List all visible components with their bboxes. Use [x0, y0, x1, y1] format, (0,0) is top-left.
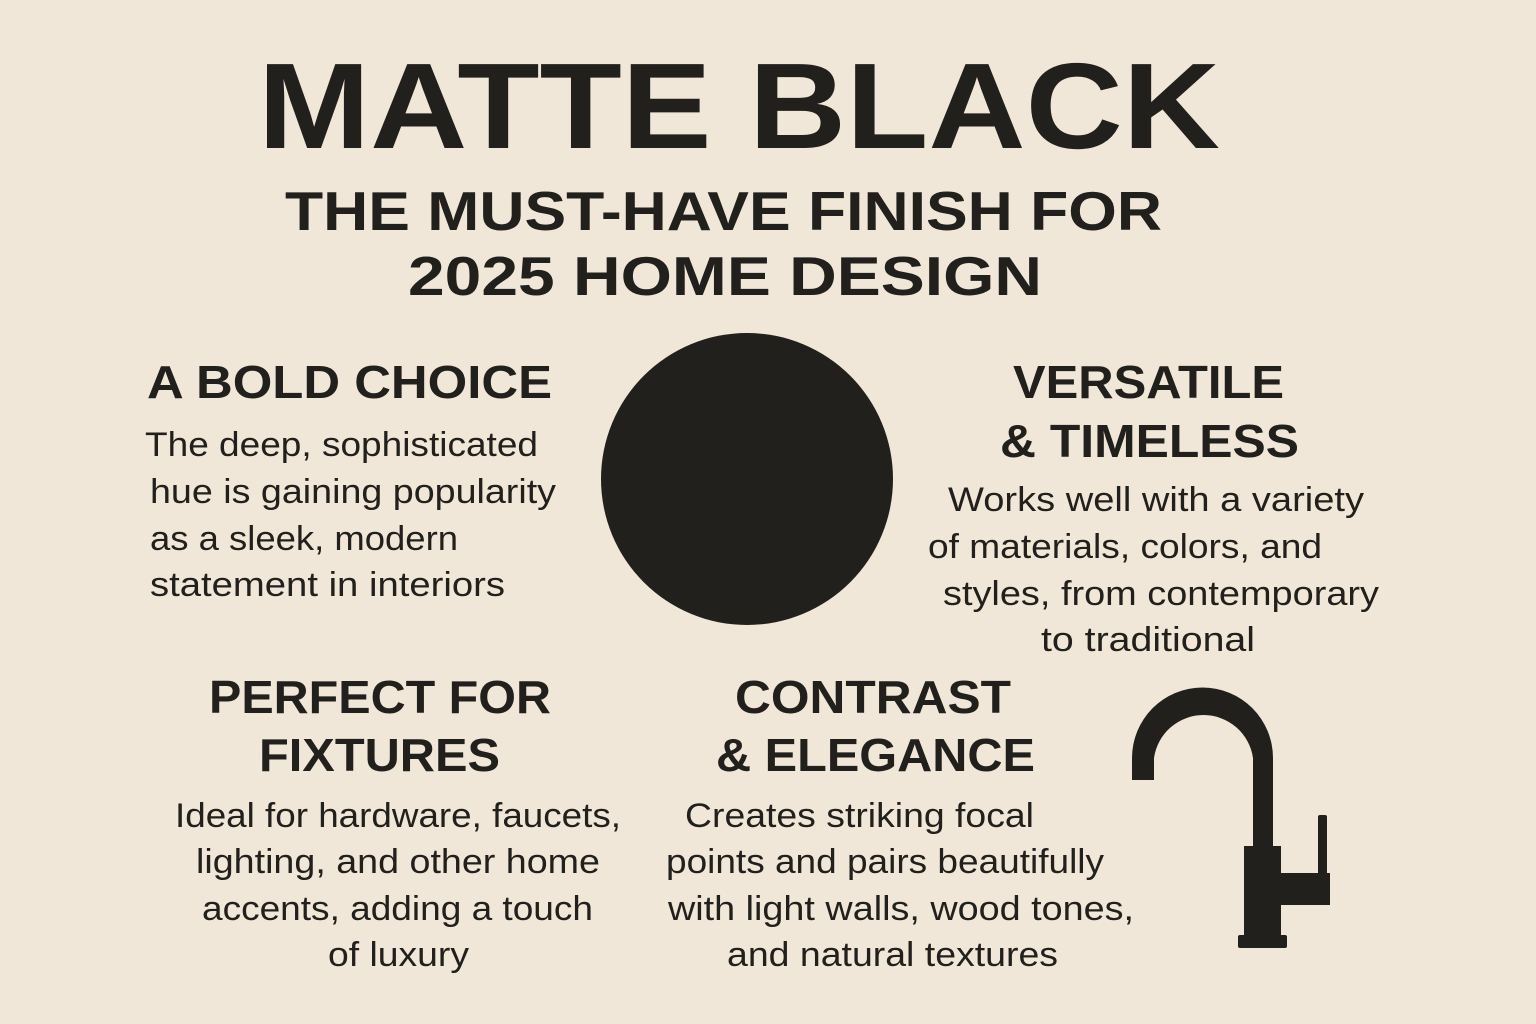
- heading: versatile & timeless: VERSATILE: [1013, 356, 1284, 408]
- panel: versatile & timeless: [928, 356, 1379, 659]
- text: contrast body: with light walls, wood tones,: [667, 890, 1134, 928]
- subtitle: [285, 180, 1162, 307]
- heading: perfect for fixtures: PERFECT FOR: [209, 671, 551, 723]
- text: contrast body: and natural textures: [727, 936, 1058, 974]
- text: fixtures body: lighting, and other home: [196, 843, 600, 881]
- text: versatile body: Works well with a variety: [948, 481, 1364, 519]
- heading: contrast & elegance: CONTRAST: [735, 671, 1011, 723]
- text: fixtures body: accents, adding a touch: [202, 890, 593, 928]
- title: MATTE BLACK: [258, 38, 1220, 174]
- text: contrast body: points and pairs beautifully: [666, 843, 1104, 881]
- icon: matte black circle: [601, 333, 893, 625]
- heading: contrast & elegance: [716, 671, 1035, 781]
- icon: faucet: [1132, 688, 1330, 948]
- text: bold choice body: The deep, sophisticated: [145, 426, 538, 464]
- subtitle: THE MUST-HAVE FINISH FOR: [285, 180, 1162, 242]
- text: bold choice body: as a sleek, modern: [150, 520, 458, 558]
- text: versatile body: [928, 481, 1379, 659]
- heading: perfect for fixtures: [209, 671, 551, 781]
- text: bold choice body: [145, 426, 556, 604]
- heading: contrast & elegance: & ELEGANCE: [716, 729, 1035, 781]
- panel: contrast & elegance: [666, 671, 1134, 974]
- text: versatile body: styles, from contemporary: [943, 575, 1379, 613]
- heading: versatile & timeless: [1000, 356, 1299, 467]
- subtitle: 2025 HOME DESIGN: [408, 245, 1042, 307]
- text: contrast body: [666, 797, 1134, 974]
- heading: a bold choice: A BOLD CHOICE: [147, 356, 552, 408]
- panel: perfect for fixtures: [175, 671, 621, 974]
- text: fixtures body: [175, 797, 621, 974]
- text: fixtures body: of luxury: [328, 936, 469, 974]
- text: versatile body: to traditional: [1041, 621, 1255, 659]
- heading: perfect for fixtures: FIXTURES: [259, 729, 500, 781]
- text: bold choice body: statement in interiors: [150, 566, 505, 604]
- text: contrast body: Creates striking focal: [685, 797, 1034, 835]
- heading: versatile & timeless: & TIMELESS: [1000, 415, 1299, 467]
- text: bold choice body: hue is gaining popularity: [150, 473, 556, 511]
- text: fixtures body: Ideal for hardware, faucets,: [175, 797, 621, 835]
- text: versatile body: of materials, colors, and: [928, 528, 1322, 566]
- panel: a bold choice: [145, 356, 556, 604]
